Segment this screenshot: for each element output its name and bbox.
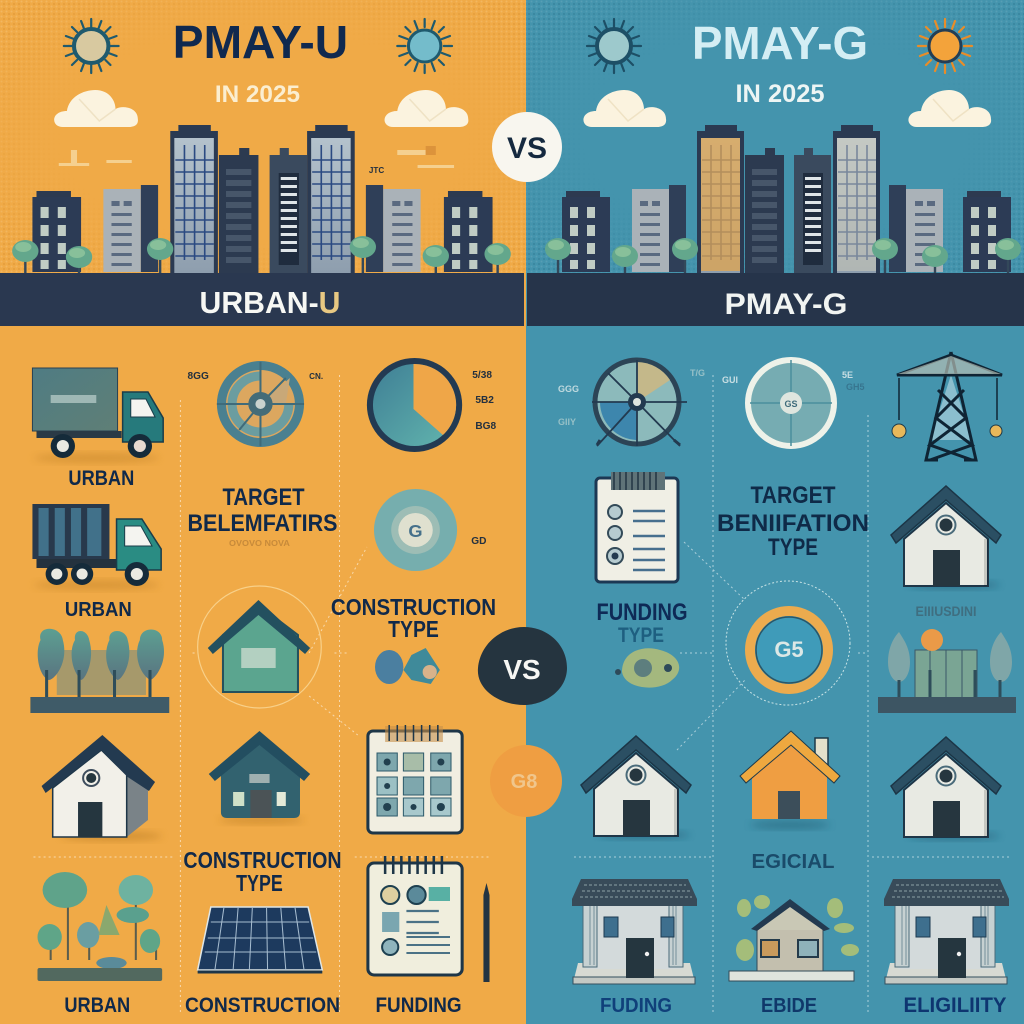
small label: faint caption right: EIIIUSDINI xyxy=(916,603,976,619)
icon: white house left xyxy=(42,735,162,841)
pie legend labels xyxy=(472,370,497,432)
label: construction type lower: CONSTRUCTION xyxy=(183,847,342,873)
icon: columned house two xyxy=(884,879,1009,984)
small labels: wheel right: T/G xyxy=(690,368,705,378)
icon: small blobs left xyxy=(375,648,440,684)
icon: target circle left: G xyxy=(408,521,423,541)
small labels: ring right: GH5 xyxy=(846,382,865,392)
badge: top VS xyxy=(492,112,562,182)
label: urban bottom: URBAN xyxy=(64,994,130,1017)
label: urban two: URBAN xyxy=(65,599,132,621)
icon: dark house left xyxy=(209,731,310,824)
label: funding right bottom: FUDING xyxy=(600,995,672,1017)
icon: cloud right one xyxy=(583,90,666,127)
label: funding type: TYPE xyxy=(618,624,664,647)
icon: cloud right two xyxy=(908,90,991,127)
icon: sun right two xyxy=(918,19,972,73)
title: PMAY-U: PMAY-U xyxy=(173,16,348,68)
dotted guide lines right xyxy=(574,375,1010,1012)
icon: wheel chart right xyxy=(592,360,687,446)
subtitle: in 2025 left: IN 2025 xyxy=(215,81,300,108)
icon: cloud left one xyxy=(54,90,138,127)
small labels: wheel left xyxy=(187,371,323,382)
small labels: wheel right: GGG xyxy=(558,384,579,394)
label: construction bottom: CONSTRUCTION xyxy=(185,994,340,1017)
small labels: ring right: GUI xyxy=(722,375,738,385)
small labels: wheel right xyxy=(558,368,705,427)
badge: top VS: VS xyxy=(507,132,547,165)
label: target beneficiaries right xyxy=(717,482,869,561)
label: target beneficiaries left: BELEMFATIRS xyxy=(187,510,337,537)
band: header strip xyxy=(0,273,1024,326)
icon: checklist clipboard right xyxy=(596,472,678,582)
small labels: wheel right: GIIY xyxy=(558,417,576,427)
chart: pie left xyxy=(367,358,462,452)
small labels: ring right xyxy=(722,370,865,392)
icon: tree group left xyxy=(37,872,162,981)
label: urban one: URBAN xyxy=(68,467,134,490)
background: orange PMAY-U half xyxy=(0,0,526,1024)
icon: sun right one xyxy=(587,19,641,73)
panel: PMAY-G rural side xyxy=(545,17,1021,1017)
label: target beneficiaries right: TYPE xyxy=(768,534,818,561)
badge: orange circle xyxy=(490,745,562,817)
label: construction type lower: TYPE xyxy=(236,870,283,896)
label: funding bottom: FUNDING xyxy=(376,994,462,1017)
icon: target circle left xyxy=(374,489,457,571)
icon: tree row right xyxy=(878,629,1016,713)
label: target beneficiaries left: TARGET xyxy=(222,484,305,511)
icon: solar panel xyxy=(198,907,322,972)
small label: target left: GD xyxy=(471,536,486,547)
label: eligibility faded: EGICIAL xyxy=(752,851,834,873)
pie legend labels: 5B2 xyxy=(475,395,494,406)
icon: house top right xyxy=(891,486,1001,589)
label: target beneficiaries left xyxy=(187,484,337,548)
dotted guide lines left xyxy=(33,375,492,1012)
label: target beneficiaries right: BENIIFATION xyxy=(717,510,869,537)
icon: gold ring: G5 xyxy=(774,637,804,662)
icon: house in circle left xyxy=(198,586,321,708)
badge: middle VS: VS xyxy=(503,654,541,685)
skyline: urban left xyxy=(12,125,511,287)
small labels: ring right: 5E xyxy=(842,370,853,380)
subtitle: in 2025 right: IN 2025 xyxy=(736,80,825,108)
small labels: wheel left: CN. xyxy=(309,372,323,381)
label: construction type upper xyxy=(331,594,496,642)
label: funding type: FUNDING xyxy=(596,599,688,626)
small label: skyline note: JTC xyxy=(369,166,384,175)
icon: truck one xyxy=(32,368,163,463)
icon: checklist clipboard left xyxy=(368,856,462,975)
icon: white house far right xyxy=(891,737,1001,840)
label: eligibility: ELIGILIITY xyxy=(904,994,1006,1017)
band label: PMAY-G: PMAY-G xyxy=(724,288,848,321)
label: target beneficiaries left: OVOVO NOVA xyxy=(229,539,290,548)
icon: wheel chart left xyxy=(217,361,304,447)
icon: orange house xyxy=(740,731,840,829)
pie legend labels: 5/38 xyxy=(472,370,492,381)
icon: columned house one xyxy=(572,879,697,984)
badge: middle VS xyxy=(478,627,567,705)
badge: orange circle: G8 xyxy=(511,771,537,793)
icon: white ring chart right xyxy=(748,360,834,446)
label: funding type xyxy=(596,599,688,647)
title: PMAY-G: PMAY-G xyxy=(692,17,868,69)
icon: sun left two xyxy=(397,19,452,73)
icon: truck two xyxy=(32,504,161,590)
pie legend labels: BG8 xyxy=(475,421,497,432)
label: construction type upper: TYPE xyxy=(388,616,439,642)
icon: white house right row xyxy=(581,736,691,839)
panel: PMAY-U urban side xyxy=(12,16,511,1017)
skyline: rural right xyxy=(545,125,1021,286)
icon: pen xyxy=(483,883,490,982)
icon: transmission tower xyxy=(892,352,1002,460)
icon: calendar grid xyxy=(368,725,462,833)
icon: white ring chart right: GS xyxy=(784,399,798,409)
icon: green blob xyxy=(615,648,679,688)
icon: tree row left xyxy=(30,629,169,713)
small labels: wheel left: 8GG xyxy=(187,371,209,382)
icon: cloud left two xyxy=(385,90,468,127)
label: construction type lower xyxy=(183,847,342,896)
label: ebide: EBIDE xyxy=(761,995,817,1017)
decoration: faint sparkles xyxy=(59,146,454,168)
icon: gold ring xyxy=(726,581,850,705)
label: construction type upper: CONSTRUCTION xyxy=(331,594,496,620)
icon: small house with leaves xyxy=(729,895,859,981)
background: teal PMAY-G half xyxy=(526,0,1024,1024)
band label: URBAN-U: URBAN-U xyxy=(200,285,340,320)
label: target beneficiaries right: TARGET xyxy=(750,482,836,509)
icon: sun left one xyxy=(64,19,119,73)
